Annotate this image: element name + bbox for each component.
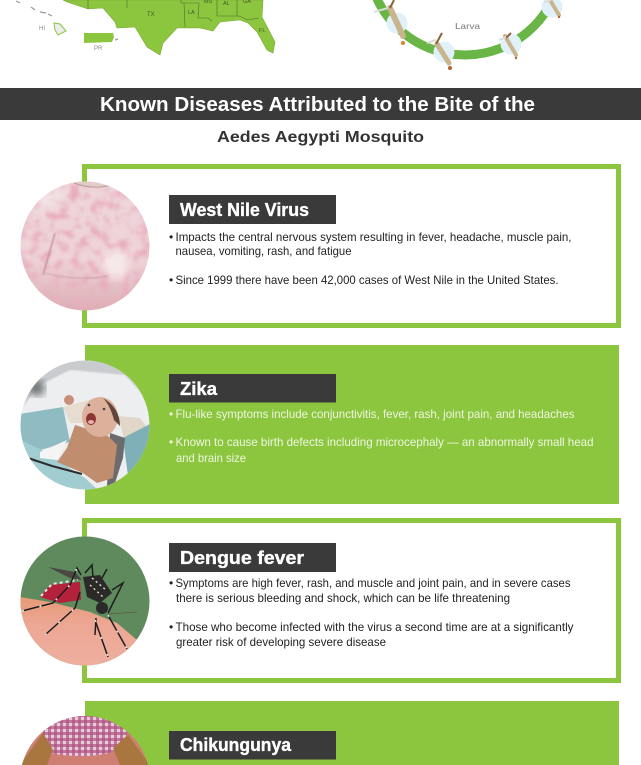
larva label: Larva — [455, 21, 480, 31]
label: Dengue fever: Dengue fever — [180, 548, 304, 568]
map: southern United States: FL — [259, 28, 265, 34]
text: Dengue fever facts: • — [169, 576, 173, 590]
label: Zika: Zika — [180, 379, 218, 399]
text: Zika facts — [169, 407, 594, 465]
text: Zika facts: and brain size — [176, 451, 246, 465]
text: Zika facts: • — [169, 435, 173, 449]
map: southern United States: HI — [39, 26, 45, 32]
text: West Nile Virus facts: nausea, vomiting, rash, and fatigue — [176, 244, 352, 258]
text: Dengue fever facts — [169, 576, 574, 649]
text: Zika facts: • — [169, 407, 173, 421]
label: Chikungunya: Chikungunya — [180, 735, 292, 755]
label: West Nile Virus: West Nile Virus — [180, 200, 309, 220]
map: southern United States: LA — [188, 10, 195, 16]
label: Zika — [169, 374, 336, 402]
photo: infant — [20, 360, 150, 492]
subtitle: Aedes Aegypti Mosquito — [217, 129, 424, 146]
text: West Nile Virus facts: • — [169, 230, 173, 244]
map: southern United States: AL — [223, 1, 230, 7]
text: Dengue fever facts: there is serious bleeding and shock, which can be life threatening — [176, 591, 510, 605]
map: southern United States — [16, 0, 275, 55]
text: Dengue fever facts: greater risk of developing severe disease — [176, 635, 386, 649]
text: Dengue fever facts: • — [169, 620, 173, 634]
text: West Nile Virus facts — [169, 230, 572, 287]
mosquito life cycle ring — [368, 0, 562, 70]
photo: rash — [20, 181, 150, 311]
photo: mosquito on skin — [20, 536, 150, 670]
photo: rash under lifted shirt — [20, 716, 150, 765]
label: Chikungunya — [169, 731, 336, 760]
panel: Zika — [20, 345, 619, 504]
text: West Nile Virus facts: • — [169, 273, 173, 287]
panel: West Nile Virus — [20, 166, 618, 326]
label: West Nile Virus — [169, 195, 336, 224]
text: West Nile Virus facts: Impacts the central nervous system resulting in fever, headache, muscle pain, — [176, 230, 572, 244]
text: West Nile Virus facts: Since 1999 there have been 42,000 cases of West Nile in the United States. — [176, 273, 558, 287]
map: southern United States: TX — [147, 12, 155, 18]
panel: Dengue fever — [20, 520, 618, 680]
text: Zika facts: Known to cause birth defects including microcephaly — an abnormally small head — [176, 435, 594, 449]
text: Dengue fever facts: Symptoms are high fever, rash, and muscle and joint pain, and in severe cases — [176, 576, 570, 590]
text: Dengue fever facts: Those who become infected with the virus a second time are at a significantly — [176, 620, 574, 634]
text: Zika facts: Flu-like symptoms include conjunctivitis, fever, rash, joint pain, and headaches — [176, 407, 574, 421]
panel: Chikungunya — [20, 701, 619, 765]
banner — [0, 88, 641, 120]
title: Known Diseases Attributed to the Bite of the — [100, 94, 535, 116]
map: southern United States: PR — [94, 46, 103, 52]
label: Dengue fever — [169, 543, 336, 572]
